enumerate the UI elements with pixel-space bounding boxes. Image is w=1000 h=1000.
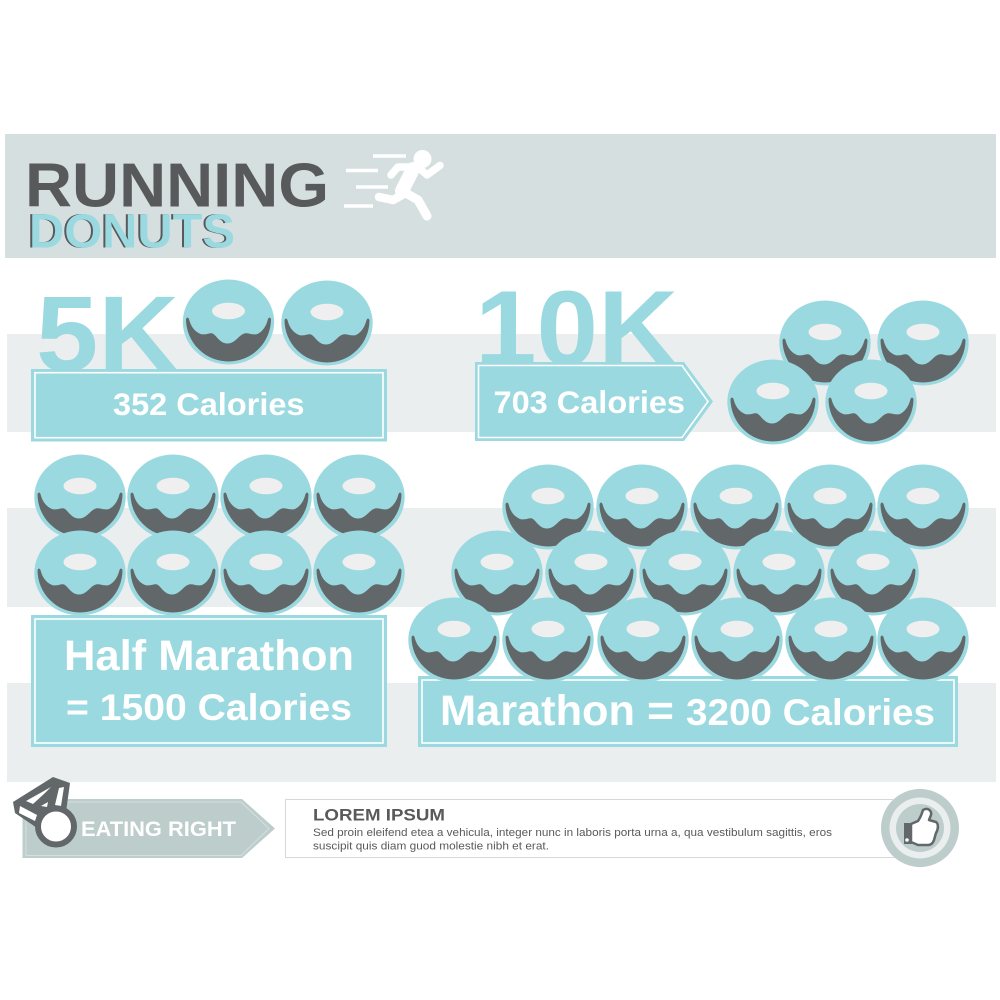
donuts: marathon xyxy=(408,464,969,682)
label box: marathon: 3200 Calories xyxy=(686,691,935,733)
body text: Sed proin eleifend etea a vehicula, integer nunc in laboris porta urna a, qua vestibulum sagittis, eros xyxy=(313,827,832,839)
body text xyxy=(313,827,832,852)
label box: half marathon: = 1500 Calories xyxy=(66,687,352,728)
donuts: half marathon xyxy=(34,454,405,616)
label box: half marathon: Half Marathon xyxy=(64,633,354,680)
label arrow: 703 calories: 703 Calories xyxy=(494,384,685,420)
icon: runner xyxy=(344,150,440,216)
text panel: lorem ipsum xyxy=(286,800,896,858)
header band xyxy=(5,134,996,258)
panel: marathon xyxy=(408,464,969,747)
label box: marathon: Marathon xyxy=(440,688,635,735)
heading: lorem ipsum: LOREM IPSUM xyxy=(313,806,445,824)
label box: marathon xyxy=(418,676,958,747)
background stripes xyxy=(7,334,996,782)
label box: 352 calories xyxy=(31,369,387,442)
arrow label: EATING RIGHT xyxy=(81,818,236,841)
eating right banner xyxy=(13,777,275,858)
body text: suscipit quis diam guod molestie nibh et erat. xyxy=(313,840,549,852)
icon: medal xyxy=(13,777,74,844)
icon: thumbs up badge xyxy=(881,789,959,867)
donuts: 10K xyxy=(727,300,969,444)
label box: marathon: = xyxy=(647,688,674,735)
label box: half marathon xyxy=(31,615,387,747)
panel: 5K xyxy=(31,273,387,442)
label arrow: 703 calories xyxy=(475,362,713,441)
panel: 10K xyxy=(475,268,969,444)
panel: half marathon xyxy=(31,454,405,747)
arrow label xyxy=(22,799,275,858)
label box: 352 calories: 352 Calories xyxy=(113,386,304,422)
title: running: RUNNING xyxy=(25,150,329,220)
heading: 10K: 10K xyxy=(475,268,678,388)
subtitle: donuts: DONUTS xyxy=(29,206,235,258)
heading: 5K: 5K xyxy=(36,273,179,394)
subtitle: donuts: DONUTS xyxy=(27,206,233,258)
donuts: 5K xyxy=(183,280,373,366)
